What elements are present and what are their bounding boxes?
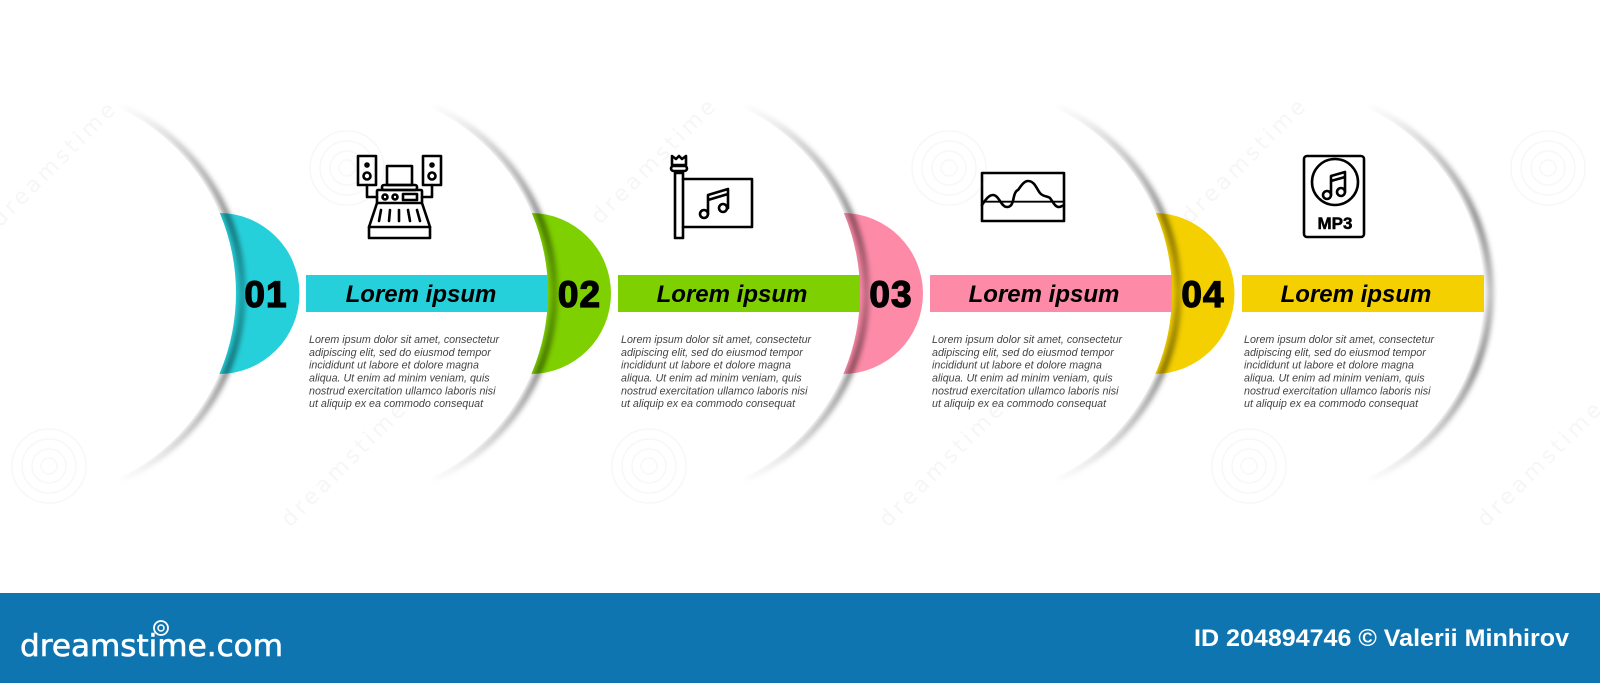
title bar: step 1 (306, 275, 548, 312)
text block: step 2: Lorem ipsum dolor sit amet, consectetur (621, 334, 812, 346)
text block: step 1: incididunt ut labore et dolore magna (309, 360, 479, 372)
text block: step 3: aliqua. Ut enim ad minim veniam, quis (932, 372, 1113, 384)
logo: dreamstime.com: dreamstime.com (20, 629, 283, 664)
text block: step 3: nostrud exercitation ullamco laboris nisi (932, 385, 1119, 397)
panel: step 3 (762, 88, 1180, 498)
number circle: 02 (450, 213, 611, 374)
text block: step 4: ut aliquip ex ea commodo consequat (1244, 398, 1419, 410)
text block: step 4: incididunt ut labore et dolore magna (1244, 360, 1414, 372)
icon: mp3 file (1304, 156, 1364, 237)
number circle: 01 (138, 213, 300, 374)
number circle: 03 (762, 213, 923, 374)
number circle: 04: 04 (1181, 274, 1225, 315)
text block: step 2: ut aliquip ex ea commodo consequat (621, 398, 796, 410)
title bar: step 4: Lorem ipsum (1281, 281, 1431, 308)
panel: step 4 (1074, 88, 1492, 498)
footer banner (0, 593, 1600, 683)
icon: sound wave (982, 173, 1064, 221)
title bar: step 3 (930, 275, 1172, 312)
text block: step 1: Lorem ipsum dolor sit amet, consectetur (309, 334, 500, 346)
panel: step 2 (450, 88, 868, 498)
title bar: step 4 (1242, 275, 1484, 312)
title bar: step 2: Lorem ipsum (657, 281, 807, 308)
text block: step 1: aliqua. Ut enim ad minim veniam, quis (309, 372, 490, 384)
panel: step 1 (138, 88, 556, 498)
watermark: dreamstime (587, 95, 721, 229)
title bar: step 3: Lorem ipsum (969, 281, 1119, 308)
text block: step 2: adipiscing elit, sed do eiusmod tempor (621, 347, 803, 359)
credit: image ID and author: ID 204894746 © Valerii Minhirov (1194, 625, 1569, 652)
number circle: 02: 02 (558, 274, 601, 315)
panel: left blank circle (0, 88, 244, 498)
icon: music flag (671, 156, 752, 238)
text block: step 2: aliqua. Ut enim ad minim veniam, quis (621, 372, 802, 384)
text block: step 4: nostrud exercitation ullamco laboris nisi (1244, 385, 1431, 397)
text block: step 1: nostrud exercitation ullamco laboris nisi (309, 385, 496, 397)
text block: step 3: incididunt ut labore et dolore magna (932, 360, 1102, 372)
text block: step 1: adipiscing elit, sed do eiusmod tempor (309, 347, 491, 359)
number circle: 03: 03 (869, 274, 913, 315)
number circle: 01: 01 (244, 274, 288, 315)
text block: step 1: ut aliquip ex ea commodo consequat (309, 398, 484, 410)
text block: step 3: adipiscing elit, sed do eiusmod tempor (932, 347, 1114, 359)
text block: step 2: nostrud exercitation ullamco laboris nisi (621, 385, 808, 397)
text block: step 3: ut aliquip ex ea commodo consequat (932, 398, 1107, 410)
title bar: step 1: Lorem ipsum (346, 281, 496, 308)
text block: step 4: aliqua. Ut enim ad minim veniam, quis (1244, 372, 1425, 384)
text block: step 2: incididunt ut labore et dolore magna (621, 360, 791, 372)
text block: step 3: Lorem ipsum dolor sit amet, consectetur (932, 334, 1123, 346)
number circle: 04 (1074, 213, 1234, 374)
watermark: dreamstime (1177, 95, 1311, 229)
watermark: dreamstime (875, 398, 1009, 532)
watermark: dreamstime (277, 398, 411, 532)
icon: studio mixer (358, 156, 441, 238)
title bar: step 2 (618, 275, 860, 312)
watermark (0, 95, 1600, 532)
text block: step 4: Lorem ipsum dolor sit amet, consectetur (1244, 334, 1435, 346)
icon: mp3 file: MP3 (1318, 214, 1352, 233)
text block: step 4: adipiscing elit, sed do eiusmod tempor (1244, 347, 1426, 359)
